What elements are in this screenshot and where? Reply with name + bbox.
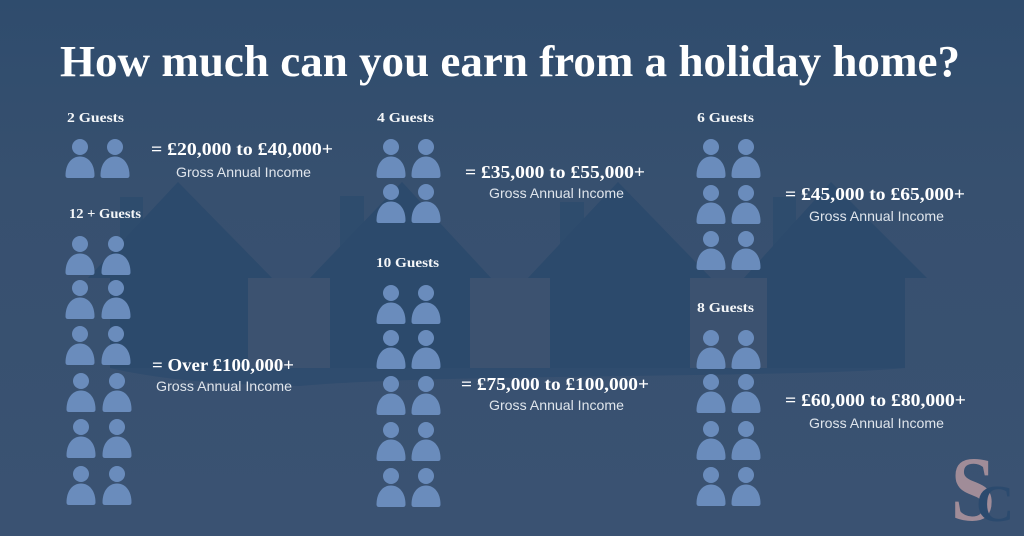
group: 4 guests: = £35,000 to £55,000+ — [465, 162, 645, 182]
group: 6 guests: 6 Guests — [697, 111, 755, 126]
group: 10 guests: 10 Guests — [376, 256, 440, 271]
group: 8 guests: 8 Guests — [697, 301, 755, 316]
group: 10 guests: Gross Annual Income — [489, 397, 624, 413]
group: 12+ guests — [66, 207, 294, 505]
group: 6 guests — [696, 111, 965, 270]
group: 8 guests: = £60,000 to £80,000+ — [785, 390, 966, 410]
house 3 — [528, 182, 767, 368]
group: 2 guests — [66, 111, 333, 180]
group: 2 guests: = £20,000 to £40,000+ — [151, 139, 333, 159]
group: 4 guests — [376, 111, 645, 223]
group: 6 guests: = £45,000 to £65,000+ — [785, 184, 965, 204]
group: 4 guests: 4 Guests — [377, 111, 435, 126]
group: 12+ guests: 12 + Guests — [69, 207, 142, 222]
group: 8 guests — [696, 301, 966, 506]
group: 12+ guests: Gross Annual Income — [156, 378, 292, 394]
house 2 — [310, 182, 552, 368]
group: 6 guests: Gross Annual Income — [809, 208, 944, 224]
group: 10 guests — [376, 256, 649, 507]
house 4 — [744, 182, 927, 368]
group: 2 guests: 2 Guests — [67, 111, 125, 126]
group: 8 guests: Gross Annual Income — [809, 415, 944, 431]
logo: C — [976, 476, 1014, 533]
houses illustration — [88, 182, 927, 386]
group: 10 guests: = £75,000 to £100,000+ — [461, 374, 649, 394]
group: 2 guests: Gross Annual Income — [176, 164, 311, 180]
ground shadow — [110, 368, 905, 386]
group: 12+ guests: = Over £100,000+ — [152, 355, 294, 375]
group: 4 guests: Gross Annual Income — [489, 185, 624, 201]
title: How much can you earn from a holiday home? — [60, 37, 960, 86]
house 1 — [88, 182, 331, 368]
